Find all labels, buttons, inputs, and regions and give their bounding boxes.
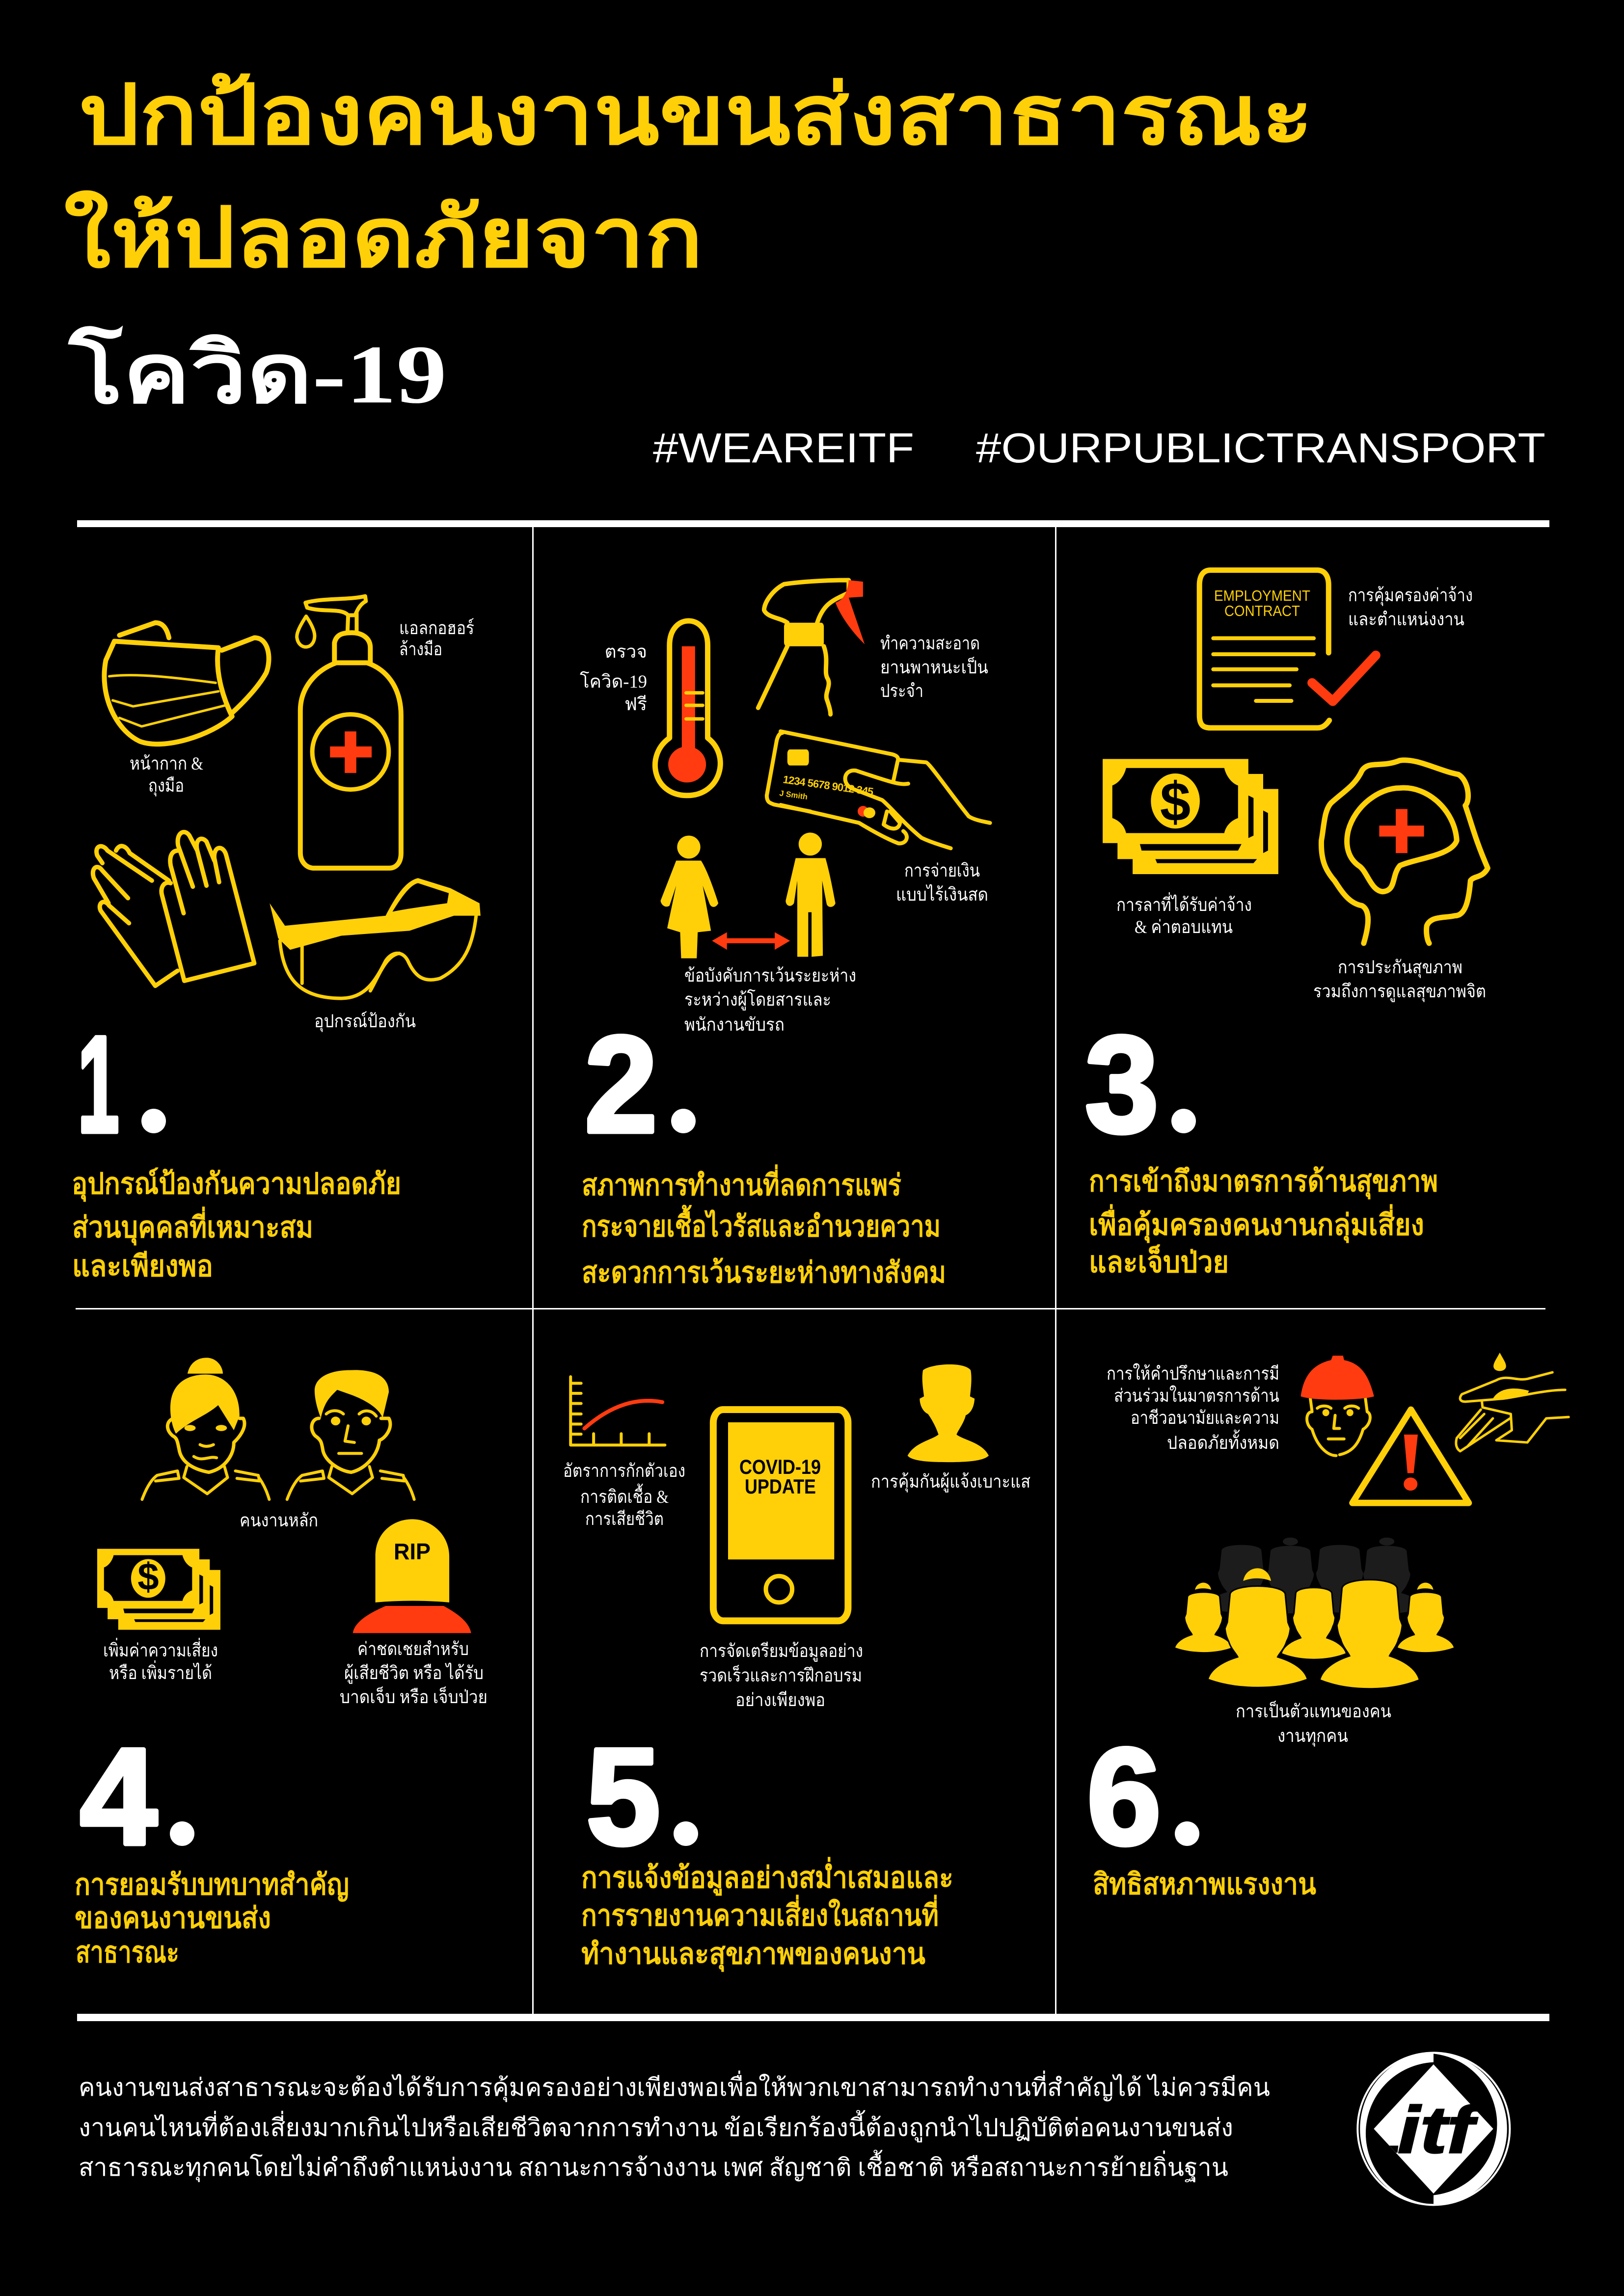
label: cashless bbox=[896, 861, 988, 905]
icon: card payment: 1234 5678 9012 345 bbox=[782, 773, 874, 798]
footer text: สาธารณะทุกคนโดยไม่คำถึงตำแหน่งงาน สถานะการจ้างงาน เพศ สัญชาติ เชื้อชาติ หรือสถานะการย้ายถิ่นฐาน bbox=[79, 2150, 1228, 2182]
label: sanitizer bbox=[399, 618, 474, 660]
label: free testing: โควิด-19 bbox=[580, 671, 647, 692]
heading 2: สะดวกการเว้นระยะห่างทางสังคม bbox=[582, 1256, 946, 1289]
label: rates: อัตราการกักตัวเอง bbox=[563, 1461, 685, 1481]
logo: ITF: itf bbox=[1398, 2093, 1481, 2167]
label: paid leave: & ค่าตอบแทน bbox=[1135, 917, 1233, 937]
icon: smartphone update: UPDATE bbox=[745, 1475, 816, 1498]
label: wage protection: การคุ้มครองค่าจ้าง bbox=[1348, 586, 1473, 606]
heading 1 bbox=[72, 1167, 401, 1282]
icon: worker with helmet bbox=[1300, 1356, 1374, 1456]
number 6: 6 bbox=[1087, 1720, 1161, 1873]
footer text: งานคนไหนที่ต้องเสี่ยงมากเกินไปหรือเสียชีวิตจากการทำงาน ข้อเรียกร้องนี้ต้องถูกนำไปปฏิบัติต่อคนงานขนส่ง bbox=[79, 2110, 1233, 2142]
label: sanitizer: ล้างมือ bbox=[399, 640, 442, 660]
icon: gravestone RIP: RIP bbox=[394, 1539, 431, 1564]
label: representation bbox=[1236, 1700, 1391, 1747]
heading 4: สาธารณะ bbox=[76, 1936, 179, 1969]
heading 5: การแจ้งข้อมูลอย่างสม่ำเสมอและ bbox=[581, 1857, 953, 1896]
title: โควิด-19 bbox=[68, 325, 447, 421]
label: mask and gloves bbox=[130, 754, 203, 797]
icon: money bbox=[1103, 759, 1278, 874]
icon: sanitizer bottle bbox=[297, 596, 401, 868]
footer text: คนงานขนส่งสาธารณะจะต้องได้รับการคุ้มครองอย่างเพียงพอเพื่อให้พวกเขาสามารถทำงานที่สำคัญได้ ไม่ควรมีคน bbox=[79, 2071, 1270, 2102]
icon: whistleblower silhouette bbox=[908, 1364, 989, 1462]
label: paid leave: การลาที่ได้รับค่าจ้าง bbox=[1116, 892, 1252, 915]
footer text bbox=[79, 2071, 1270, 2182]
heading 1: ส่วนบุคคลที่เหมาะสม bbox=[72, 1206, 313, 1246]
icon: money: $ bbox=[1160, 771, 1191, 832]
label: vehicle cleaning: ทำความสะอาด bbox=[880, 634, 980, 654]
icon: woman and man distancing bbox=[661, 832, 836, 958]
number 2: 2 bbox=[585, 1008, 657, 1161]
number 3 bbox=[1085, 1008, 1196, 1161]
number 1: 1 bbox=[78, 1008, 119, 1161]
icon: face mask bbox=[104, 623, 269, 744]
number 4 bbox=[80, 1720, 194, 1873]
label: consultation: อาชีวอนามัยและความ bbox=[1131, 1408, 1279, 1428]
icon: hand washing bbox=[1456, 1353, 1569, 1451]
label: consultation: การให้คำปรึกษาและการมี bbox=[1107, 1363, 1279, 1384]
panel: 6 union rights bbox=[1087, 1353, 1569, 1900]
label: representation: งานทุกคน bbox=[1277, 1726, 1348, 1747]
icon: smartphone update: COVID-19 bbox=[739, 1455, 821, 1478]
heading 3: การเข้าถึงมาตรการด้านสุขภาพ bbox=[1089, 1165, 1438, 1200]
label: protective equipment: อุปกรณ์ป้องกัน bbox=[314, 1011, 416, 1032]
panel: 4 essential worker recognition bbox=[75, 1358, 487, 1969]
icon: thermometer bbox=[655, 621, 720, 796]
icon: female worker bbox=[142, 1358, 269, 1499]
hashtags: #WEAREITF bbox=[653, 425, 914, 472]
label: distancing: ข้อบังคับการเว้นระยะห่าง bbox=[684, 966, 856, 986]
icon: crowd of workers bbox=[1174, 1538, 1455, 1689]
number 5: 5 bbox=[586, 1720, 660, 1873]
icon: gloves bbox=[93, 832, 254, 986]
label: information and training: การจัดเตรียมข้อมูลอย่าง bbox=[700, 1641, 863, 1662]
label: distancing bbox=[684, 966, 856, 1035]
heading 4 bbox=[75, 1869, 349, 1969]
label: compensation bbox=[340, 1639, 487, 1708]
label: information and training: อย่างเพียงพอ bbox=[735, 1690, 825, 1710]
hashtags bbox=[653, 425, 1545, 472]
label: compensation: บาดเจ็บ หรือ เจ็บป่วย bbox=[340, 1685, 487, 1708]
label: health insurance: การประกันสุขภาพ bbox=[1338, 958, 1462, 978]
heading 5: การรายงานความเสี่ยงในสถานที่ bbox=[581, 1895, 939, 1932]
label: sanitizer: แอลกอฮอร์ bbox=[399, 618, 474, 639]
label: vehicle cleaning bbox=[880, 634, 988, 701]
icon: line chart bbox=[570, 1377, 665, 1445]
icon: employment contract bbox=[1199, 570, 1376, 728]
icon: money: $ bbox=[137, 1555, 159, 1598]
heading 3: และเจ็บป่วย bbox=[1089, 1244, 1229, 1279]
label: rates: การติดเชื้อ & bbox=[580, 1483, 669, 1507]
label: information and training: รวดเร็วและการฝึกอบรม bbox=[700, 1664, 862, 1686]
icon: money bbox=[97, 1549, 220, 1630]
label: whistleblower protection: การคุ้มกันผู้แจ้งเบาะแส bbox=[871, 1472, 1030, 1493]
icon: safety goggles bbox=[270, 878, 481, 998]
label: cashless: การจ่ายเงิน bbox=[904, 861, 980, 881]
label: vehicle cleaning: ยานพาหนะเป็น bbox=[880, 656, 988, 678]
icon: spray bottle bbox=[758, 580, 865, 715]
heading 4: ของคนงานขนส่ง bbox=[75, 1902, 271, 1934]
label: consultation bbox=[1107, 1363, 1279, 1453]
heading 4: การยอมรับบทบาทสำคัญ bbox=[75, 1869, 349, 1902]
label: health insurance: รวมถึงการดูแลสุขภาพจิต bbox=[1313, 982, 1486, 1002]
icon: male worker bbox=[287, 1370, 414, 1499]
label: wage protection bbox=[1348, 586, 1473, 630]
label: cashless: แบบไร้เงินสด bbox=[896, 884, 988, 905]
panel: 2 working conditions bbox=[580, 580, 990, 1289]
heading 6: สิทธิสหภาพแรงงาน bbox=[1093, 1868, 1316, 1900]
label: paid leave bbox=[1116, 892, 1252, 937]
heading 3: เพื่อคุ้มครองคนงานกลุ่มเสี่ยง bbox=[1089, 1204, 1424, 1243]
heading 1: และเพียงพอ bbox=[72, 1250, 213, 1282]
number 4: 4 bbox=[80, 1720, 158, 1873]
label: free testing: ฟรี bbox=[624, 694, 647, 715]
label: free testing bbox=[580, 642, 647, 715]
icon: head with brain bbox=[1321, 760, 1488, 943]
label: distancing: พนักงานขับรถ bbox=[684, 1015, 785, 1035]
panel: 3 health measures bbox=[1085, 570, 1488, 1279]
icon: card payment bbox=[767, 731, 990, 848]
label: health insurance bbox=[1313, 958, 1486, 1002]
label: essential workers: คนงานหลัก bbox=[240, 1511, 318, 1531]
label: information and training bbox=[700, 1641, 863, 1710]
label: vehicle cleaning: ประจำ bbox=[880, 681, 923, 701]
label: hazard pay bbox=[103, 1637, 218, 1683]
label: rates bbox=[563, 1461, 685, 1529]
label: consultation: ส่วนร่วมในมาตรการด้าน bbox=[1114, 1385, 1279, 1406]
icon: employment contract: EMPLOYMENT bbox=[1214, 587, 1310, 604]
icon: warning triangle bbox=[1353, 1410, 1469, 1503]
number 6 bbox=[1087, 1720, 1199, 1873]
heading 1: อุปกรณ์ป้องกันความปลอดภัย bbox=[72, 1167, 401, 1202]
number 2 bbox=[585, 1008, 696, 1161]
panel: 5 information and reporting bbox=[563, 1364, 1030, 1972]
label: mask and gloves: ถุงมือ bbox=[148, 776, 184, 797]
heading 2: สภาพการทำงานที่ลดการแพร่ bbox=[582, 1164, 901, 1201]
heading 2 bbox=[582, 1164, 946, 1289]
icon: employment contract: CONTRACT bbox=[1224, 602, 1300, 619]
number 3: 3 bbox=[1085, 1008, 1159, 1161]
icon: card payment: J Smith bbox=[779, 789, 808, 801]
heading 5: ทำงานและสุขภาพของคนงาน bbox=[581, 1938, 925, 1972]
label: hazard pay: เพิ่มค่าความเสี่ยง bbox=[103, 1637, 218, 1661]
heading 5 bbox=[581, 1857, 953, 1972]
label: compensation: ค่าชดเชยสำหรับ bbox=[357, 1639, 469, 1659]
label: distancing: ระหว่างผู้โดยสารและ bbox=[684, 989, 831, 1011]
title: ให้ปลอดภัยจาก bbox=[64, 190, 703, 285]
heading 2: กระจายเชื้อไวรัสและอำนวยความ bbox=[582, 1204, 941, 1243]
heading 3 bbox=[1089, 1165, 1438, 1279]
icon: smartphone update bbox=[713, 1410, 848, 1621]
label: hazard pay: หรือ เพิ่มรายได้ bbox=[109, 1660, 212, 1683]
label: consultation: ปลอดภัยทั้งหมด bbox=[1167, 1429, 1279, 1453]
hashtags: #OURPUBLICTRANSPORT bbox=[976, 425, 1545, 472]
number 5 bbox=[586, 1720, 698, 1873]
label: compensation: ผู้เสียชีวิต หรือ ได้รับ bbox=[344, 1662, 484, 1684]
icon: gravestone RIP bbox=[353, 1519, 471, 1633]
label: representation: การเป็นตัวแทนของคน bbox=[1236, 1700, 1391, 1722]
title: ปกป้องคนงานขนส่งสาธารณะ bbox=[79, 70, 1313, 162]
label: wage protection: และตำแหน่งงาน bbox=[1348, 610, 1464, 630]
label: mask and gloves: หน้ากาก & bbox=[130, 754, 203, 774]
title bbox=[64, 70, 1313, 421]
panel: 1 personal protective equipment bbox=[72, 596, 481, 1282]
label: rates: การเสียชีวิต bbox=[585, 1509, 664, 1529]
logo: ITF bbox=[1356, 2052, 1511, 2206]
label: free testing: ตรวจ bbox=[605, 642, 647, 662]
